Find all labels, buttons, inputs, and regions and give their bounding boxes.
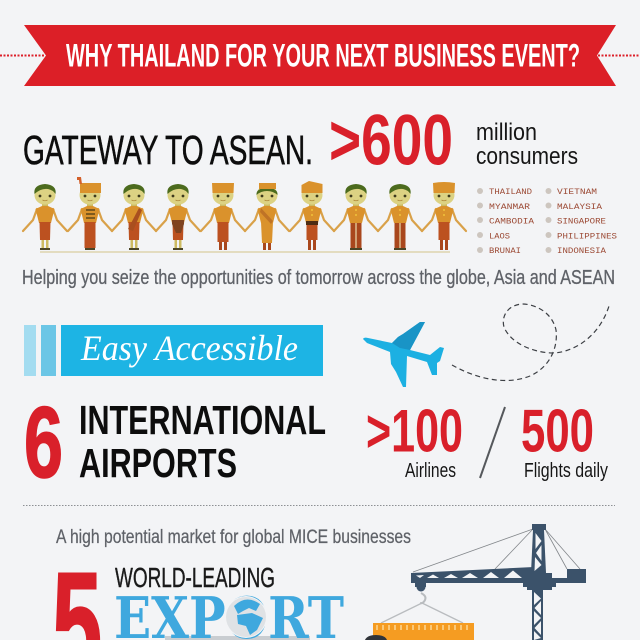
heading: international airports: AIRPORTS — [79, 440, 237, 486]
statistic: 500 flights daily: 500 — [521, 398, 594, 464]
person 9 — [378, 184, 422, 250]
person 2 — [68, 177, 112, 250]
legend: ASEAN countries: MYANMAR — [489, 203, 530, 212]
person 8 — [334, 184, 378, 250]
heading: international airports — [79, 397, 326, 486]
person 3 — [112, 184, 156, 250]
legend: ASEAN countries: BRUNAI — [489, 247, 521, 256]
statistic: 500 flights daily: Flights daily — [524, 460, 608, 482]
legend: ASEAN countries: VIETNAM — [557, 188, 597, 197]
statistic: 6: 6 — [24, 387, 63, 499]
header banner — [0, 25, 640, 86]
statistic: more than 600: >600 — [329, 102, 453, 180]
legend: ASEAN countries: THAILAND — [489, 188, 532, 197]
dashed flight path — [452, 304, 609, 380]
legend: ASEAN countries: PHILIPPINES — [557, 232, 617, 242]
legend: ASEAN countries: MALAYSIA — [557, 203, 602, 212]
crane mast — [531, 524, 546, 640]
divider slash — [480, 407, 505, 478]
legend: ASEAN countries: INDONESIA — [557, 247, 606, 256]
crane cables — [413, 529, 580, 572]
heading: gateway to ASEAN: GATEWAY TO ASEAN. — [23, 127, 313, 173]
person 10 — [422, 182, 466, 250]
icon: globe — [225, 596, 267, 638]
heading: world-leading: WORLD-LEADING — [115, 562, 275, 593]
crane jib — [411, 567, 586, 590]
heading: international airports: INTERNATIONAL — [79, 397, 326, 443]
illustration: ten people holding hands — [23, 177, 466, 252]
text: million consumers — [476, 119, 578, 170]
person 7 — [290, 181, 334, 250]
icon: airplane — [363, 322, 444, 387]
legend: ASEAN countries — [477, 188, 617, 256]
legend: ASEAN countries: SINGAPORE — [557, 218, 606, 226]
section banner: Easy Accessible: Easy Accessible — [80, 328, 298, 368]
person 6 — [245, 183, 289, 250]
text: million consumers: million — [476, 119, 537, 146]
person 1 — [23, 184, 67, 250]
section banner: Easy Accessible — [24, 325, 323, 376]
crane hook — [381, 582, 463, 623]
person 4 — [156, 184, 200, 250]
statistic: more than 100 airlines: >100 — [366, 398, 463, 464]
statistic: more than 100 airlines — [366, 398, 463, 482]
tagline: high potential market: A high potential market for global MICE businesses — [56, 527, 411, 548]
legend: ASEAN countries: LAOS — [489, 232, 510, 242]
illustration: tower crane — [365, 524, 586, 640]
statistic: more than 100 airlines: Airlines — [405, 460, 456, 482]
person 5 — [201, 183, 245, 250]
legend: ASEAN countries: CAMBODIA — [489, 218, 534, 226]
shipping container — [365, 623, 474, 640]
text: million consumers: consumers — [476, 143, 578, 170]
